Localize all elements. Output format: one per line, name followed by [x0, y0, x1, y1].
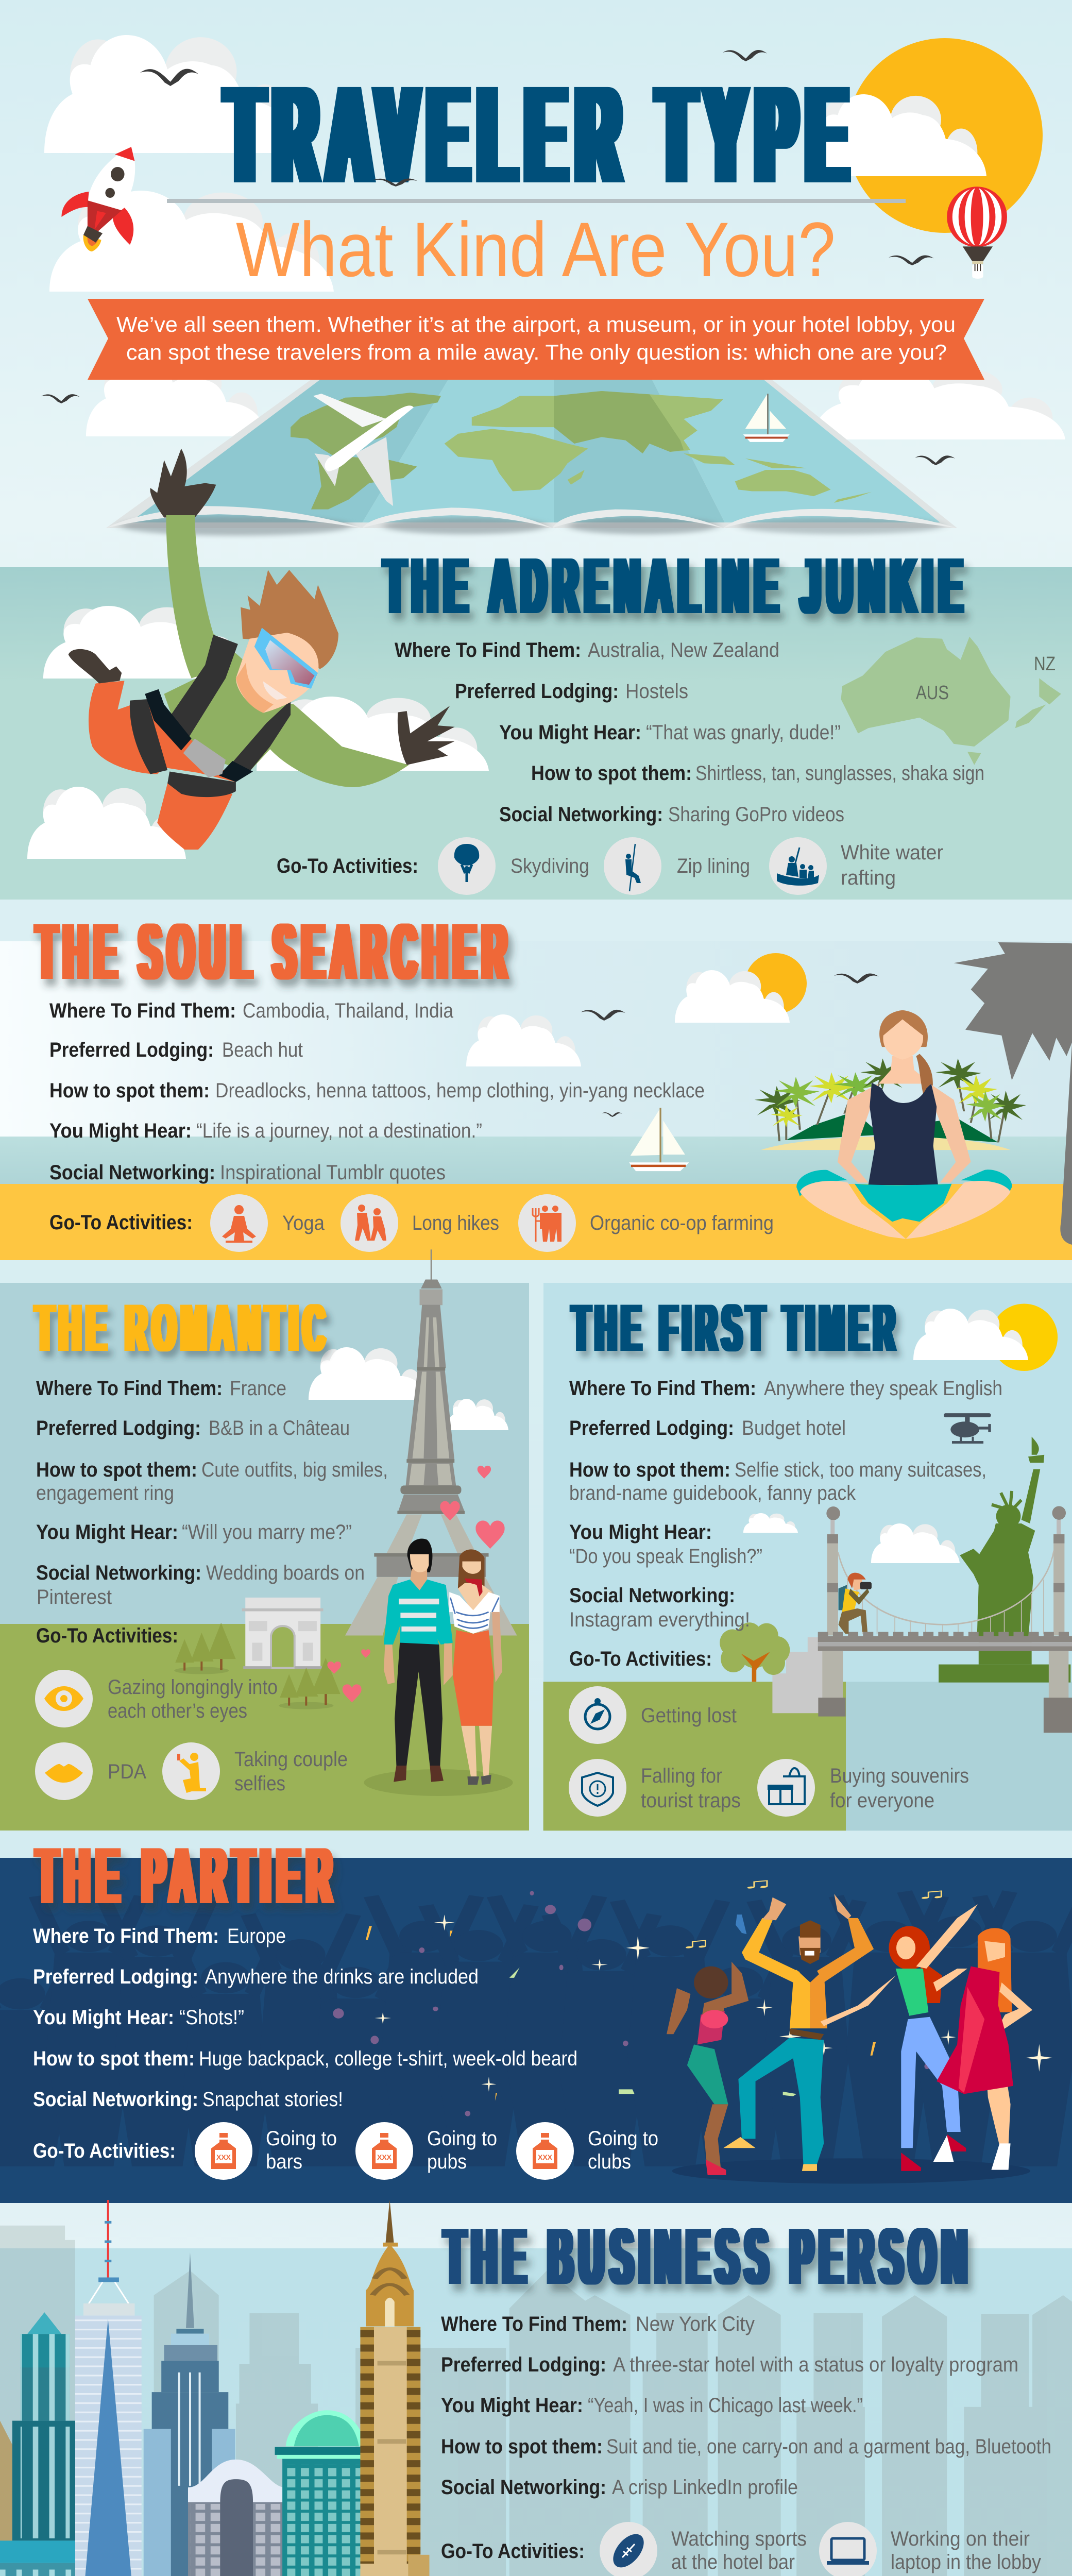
- map: Australia and New Zealand: NZ: [1034, 653, 1056, 675]
- text: how to spot them: engagement ring: [36, 1482, 174, 1504]
- illustration: photographer: [839, 1573, 872, 1634]
- text: how to spot them: Dreadlocks, henna tattoos, hemp clothing, yin-yang necklace: [215, 1079, 705, 1102]
- dancer: redhead in green: [821, 1904, 978, 2171]
- beach: [0, 1184, 1072, 1260]
- go-to activities: Go-To Activities:: [277, 855, 418, 877]
- text: preferred lodging: Beach hut: [222, 1039, 303, 1061]
- icon: zip lining: [604, 837, 661, 895]
- go-to activities: selfies: [234, 1772, 285, 1795]
- text: where to find them: Anywhere they speak English: [764, 1377, 1002, 1400]
- text: you might hear: You Might Hear:: [36, 1521, 178, 1544]
- panel: the partier: [0, 1831, 1072, 2224]
- text: where to find them: Europe: [227, 1925, 286, 1947]
- text: you might hear: [499, 721, 841, 744]
- go-to activities: bars: [266, 2150, 302, 2173]
- birds: [581, 973, 879, 1117]
- text: you might hear: You Might Hear:: [499, 721, 641, 744]
- text: you might hear: You Might Hear:: [49, 1120, 192, 1142]
- icon: yoga: [210, 1194, 268, 1252]
- text: social networking: [49, 1161, 446, 1184]
- illustration: one world trade: [75, 2200, 142, 2576]
- map bottom pages: [106, 506, 957, 536]
- go-to activities: Zip lining: [677, 855, 750, 877]
- go-to activities: at the hotel bar: [671, 2551, 795, 2573]
- panel background: [0, 1858, 1072, 2203]
- panel: the business person: [0, 2200, 1072, 2576]
- water: [846, 1682, 1072, 1831]
- go-to activities: Go-To Activities:: [49, 1211, 193, 1234]
- panel: the romantic: THE ROMANTIC: [36, 1290, 330, 1365]
- continents: [291, 391, 872, 510]
- text: how to spot them: [36, 1459, 388, 1504]
- icon: long hikes: [341, 1194, 398, 1252]
- text: social networking: Social Networking:: [499, 803, 663, 826]
- intro ribbon: [88, 299, 984, 380]
- go-to activities: Go-To Activities:: [441, 2540, 585, 2563]
- text: where to find them: Where To Find Them:: [49, 999, 236, 1022]
- go-to activities: Falling for: [641, 1765, 722, 1787]
- music notes: [680, 1875, 948, 2009]
- go-to activities: rafting: [841, 867, 896, 889]
- text: social networking: Inspirational Tumblr quotes: [220, 1161, 446, 1184]
- text: social networking: Sharing GoPro videos: [668, 803, 844, 826]
- go-to activities: Yoga: [282, 1212, 325, 1234]
- go-to activities: Organic co-op farming: [590, 1212, 774, 1234]
- text: social networking: [441, 2476, 798, 2499]
- icon: gifts: [757, 1759, 815, 1817]
- icon: football: [600, 2522, 657, 2576]
- text: preferred lodging: Budget hotel: [742, 1417, 846, 1439]
- text: social networking: [569, 1584, 750, 1631]
- text: where to find them: Where To Find Them:: [395, 639, 581, 662]
- go-to activities: [441, 2522, 1041, 2576]
- icon: eye: [35, 1670, 93, 1727]
- music notes: ♫: [680, 1935, 712, 1951]
- illustration: empire building: [144, 2252, 235, 2576]
- text: how to spot them: Cute outfits, big smiles,: [201, 1459, 388, 1481]
- icon: bottle bars: [195, 2122, 252, 2180]
- crowd silhouettes: [0, 1891, 1072, 2166]
- icon: sun: [745, 953, 807, 1014]
- text: how to spot them: How to spot them:: [36, 1459, 197, 1481]
- text: you might hear: “Will you marry me?”: [182, 1521, 352, 1544]
- world map: [106, 375, 957, 536]
- icon: sailboat: [743, 394, 790, 442]
- icon: compass: [569, 1686, 626, 1744]
- illustration: meditating woman: [796, 1010, 1012, 1239]
- go-to activities: Going to: [266, 2127, 337, 2150]
- text: where to find them: [395, 639, 779, 662]
- panel: the partier: THE PARTIER: [37, 1831, 338, 1920]
- dancer: girl in pink: [667, 1962, 748, 2175]
- text: you might hear: You Might Hear:: [33, 2006, 174, 2029]
- text: where to find them: Cambodia, Thailand, India: [243, 999, 454, 1022]
- panel: the romantic: [0, 1249, 529, 1831]
- text: social networking: Wedding boards on: [206, 1562, 365, 1584]
- intro ribbon: We’ve all seen them. Whether it’s at the airport, a museum, or in your hotel lobby, you: [116, 312, 956, 336]
- text: preferred lodging: Preferred Lodging:: [441, 2353, 606, 2376]
- text: how to spot them: How to spot them:: [49, 1079, 210, 1102]
- go-to activities: Taking couple: [234, 1748, 348, 1771]
- go-to activities: clubs: [588, 2150, 631, 2173]
- icon: rafting: [769, 837, 827, 895]
- header section: [41, 35, 1065, 536]
- background skyline: [0, 2226, 1072, 2576]
- go-to activities: Long hikes: [412, 1212, 499, 1234]
- panel background: [0, 567, 1072, 900]
- music notes: ♫: [916, 1886, 948, 1902]
- go-to activities: each other’s eyes: [108, 1700, 247, 1722]
- clouds: [27, 606, 489, 859]
- sparkles: [375, 1914, 1053, 2092]
- text: how to spot them: Selfie stick, too many suitcases,: [735, 1459, 986, 1481]
- illustration: island with palms: [755, 1058, 1026, 1150]
- go-to activities: [35, 1624, 348, 1800]
- go-to activities: [49, 1194, 774, 1252]
- text: preferred lodging: [36, 1417, 350, 1439]
- go-to activities: tourist traps: [641, 1789, 741, 1812]
- go-to activities: Going to: [588, 2127, 658, 2150]
- map: Australia and New Zealand: [841, 637, 1061, 765]
- icon: lips: [35, 1742, 93, 1800]
- go-to activities: [277, 837, 943, 895]
- text: social networking: Social Networking:: [441, 2476, 606, 2499]
- title divider: [167, 199, 906, 203]
- text: social networking: Social Networking:: [569, 1584, 735, 1607]
- text: how to spot them: [569, 1459, 986, 1504]
- go-to activities: Going to: [427, 2127, 497, 2150]
- text: preferred lodging: A three-star hotel with a status or loyalty program: [613, 2353, 1018, 2376]
- go-to activities: Skydiving: [511, 855, 589, 877]
- text: social networking: Social Networking:: [33, 2088, 198, 2111]
- bird over title: [372, 179, 417, 187]
- text: preferred lodging: Hostels: [625, 680, 688, 703]
- text: where to find them: Australia, New Zealand: [588, 639, 779, 662]
- text: preferred lodging: Preferred Lodging:: [49, 1039, 214, 1061]
- text: social networking: Instagram everything!: [569, 1608, 750, 1631]
- go-to activities: Go-To Activities:: [569, 1648, 712, 1670]
- text: preferred lodging: Preferred Lodging:: [455, 680, 619, 703]
- icon: shield: [569, 1759, 626, 1817]
- text: where to find them: Where To Find Them:: [569, 1377, 756, 1400]
- text: how to spot them: [531, 762, 984, 785]
- sky: [0, 1283, 529, 1624]
- sun: [847, 38, 1043, 233]
- icon: airplane: [313, 394, 414, 506]
- icon: organic farming: [518, 1194, 576, 1252]
- icon: laptop: [819, 2522, 877, 2576]
- text: preferred lodging: [569, 1417, 846, 1439]
- text: how to spot them: Shirtless, tan, sunglasses, shaka sign: [695, 762, 984, 785]
- go-to activities: Buying souvenirs: [830, 1765, 969, 1787]
- text: how to spot them: [33, 2047, 577, 2070]
- clouds: [309, 1347, 508, 1430]
- icon: bottle clubs: [516, 2122, 574, 2180]
- text: social networking: A crisp LinkedIn profile: [612, 2476, 798, 2499]
- go-to activities: Go-To Activities:: [36, 1624, 178, 1647]
- text: how to spot them: How to spot them:: [569, 1459, 730, 1481]
- text: how to spot them: How to spot them:: [531, 762, 692, 785]
- illustration: arc de triomphe: [242, 1598, 323, 1669]
- text: preferred lodging: Preferred Lodging:: [33, 1965, 198, 1988]
- text: where to find them: [49, 999, 454, 1022]
- panel: the adrenaline junkie: [0, 449, 1072, 900]
- go-to activities: PDA: [108, 1760, 146, 1783]
- go-to activities: Getting lost: [641, 1704, 737, 1727]
- text: social networking: [33, 2088, 343, 2111]
- text: you might hear: “Do you speak English?”: [569, 1545, 762, 1568]
- go-to activities: Working on their: [891, 2528, 1030, 2550]
- floor shadow: [672, 2158, 1030, 2183]
- birds: [41, 50, 955, 465]
- text: how to spot them: Huge backpack, college t-shirt, week-old beard: [199, 2047, 577, 2070]
- text: preferred lodging: [441, 2353, 1018, 2376]
- confetti: [333, 1891, 930, 2116]
- text: preferred lodging: Preferred Lodging:: [36, 1417, 201, 1439]
- illustration: skydiver: [69, 449, 455, 850]
- illustration: tree: [720, 1622, 790, 1682]
- icon: sun: [991, 1304, 1058, 1371]
- dancer: bearded man: [723, 1894, 874, 2171]
- music notes: ♫: [742, 1875, 774, 1891]
- sky: [0, 2248, 1072, 2576]
- text: you might hear: “Life is a journey, not a destination.”: [196, 1120, 482, 1142]
- text: social networking: Snapchat stories!: [202, 2088, 343, 2111]
- text: preferred lodging: B&B in a Château: [209, 1417, 350, 1439]
- subtitle: What Kind Are You?: [236, 206, 836, 293]
- text: where to find them: Where To Find Them:: [33, 1925, 219, 1947]
- sky: [0, 941, 1072, 1137]
- text: where to find them: France: [230, 1377, 286, 1400]
- text: social networking: Pinterest: [37, 1586, 112, 1608]
- illustration: stairs: [772, 1637, 824, 1713]
- go-to activities: Gazing longingly into: [108, 1676, 278, 1699]
- go-to activities: White water: [841, 841, 943, 864]
- illustration: statue of liberty: [939, 1437, 1070, 1683]
- illustration: eiffel tower: [345, 1249, 517, 1635]
- icon: couple selfie: [162, 1742, 220, 1800]
- icon: skydiving: [438, 837, 496, 895]
- text: preferred lodging: [33, 1965, 479, 1988]
- icon: hot air balloon: [947, 187, 1007, 279]
- intro ribbon: can spot these travelers from a mile away. The only question is: which one are you?: [126, 340, 947, 364]
- text: social networking: Social Networking:: [49, 1161, 215, 1184]
- dancer: girl in red dress: [933, 1928, 1032, 2170]
- header clouds: [44, 35, 1065, 439]
- illustration: green domed building: [275, 2410, 378, 2576]
- go-to activities: for everyone: [830, 1789, 934, 1812]
- illustration: bridge: [818, 1506, 1072, 1733]
- text: how to spot them: brand-name guidebook, fanny pack: [569, 1482, 856, 1504]
- text: you might hear: “Shots!”: [179, 2006, 244, 2029]
- text: how to spot them: How to spot them:: [33, 2047, 195, 2070]
- text: how to spot them: How to spot them:: [441, 2435, 603, 2458]
- text: where to find them: Where To Find Them:: [441, 2313, 627, 2335]
- text: you might hear: “Yeah, I was in Chicago last week.”: [588, 2394, 863, 2417]
- clouds: [466, 970, 790, 1066]
- illustration: arched building: [188, 2460, 286, 2576]
- ground: [0, 1624, 529, 1831]
- illustration: palm tree: [954, 942, 1072, 1245]
- text: social networking: Social Networking:: [36, 1562, 201, 1584]
- woman: [449, 1549, 502, 1785]
- text: where to find them: [441, 2313, 755, 2335]
- clouds: [743, 1309, 1028, 1563]
- text: you might hear: [441, 2394, 863, 2417]
- go-to activities: pubs: [427, 2150, 467, 2173]
- text: you might hear: [569, 1521, 762, 1568]
- music notes: ♫: [796, 1993, 828, 2009]
- text: where to find them: Where To Find Them:: [36, 1377, 223, 1400]
- map: Australia and New Zealand: AUS: [916, 682, 949, 704]
- text: you might hear: [49, 1120, 482, 1142]
- icon: bottle pubs: [355, 2122, 413, 2180]
- text: you might hear: You Might Hear:: [569, 1521, 712, 1544]
- ground: [543, 1682, 846, 1831]
- text: social networking: [36, 1562, 365, 1608]
- icon: rocket: [61, 146, 135, 251]
- illustration: chrysler building: [360, 2200, 439, 2576]
- illustration: tan building: [0, 2421, 12, 2541]
- text: how to spot them: [49, 1079, 705, 1102]
- icon: helicopter: [944, 1413, 991, 1444]
- illustration: trees: [174, 1623, 341, 1709]
- sky: [543, 1283, 1072, 1831]
- text: preferred lodging: Anywhere the drinks are included: [205, 1965, 479, 1988]
- text: where to find them: [569, 1377, 1002, 1400]
- go-to activities: [569, 1648, 969, 1817]
- go-to activities: Watching sports: [671, 2528, 807, 2550]
- text: you might hear: “That was gnarly, dude!”: [646, 721, 841, 744]
- illustration: teal tower: [0, 2312, 76, 2576]
- illustration: couple with hearts: [327, 1466, 513, 1796]
- text: social networking: [499, 803, 844, 826]
- text: where to find them: New York City: [636, 2313, 755, 2335]
- text: you might hear: You Might Hear:: [441, 2394, 583, 2417]
- text: you might hear: [36, 1521, 352, 1544]
- go-to activities: Go-To Activities:: [33, 2140, 176, 2162]
- panel: the soul searcher: [0, 907, 1072, 1260]
- illustration: sailboat: [629, 1108, 689, 1171]
- go-to activities: [33, 2122, 658, 2180]
- go-to activities: laptop in the lobby: [891, 2551, 1041, 2573]
- panel: the first timer: [543, 1283, 1072, 1831]
- man: [384, 1538, 453, 1782]
- sea: [0, 1137, 1072, 1184]
- text: preferred lodging: Preferred Lodging:: [569, 1417, 734, 1439]
